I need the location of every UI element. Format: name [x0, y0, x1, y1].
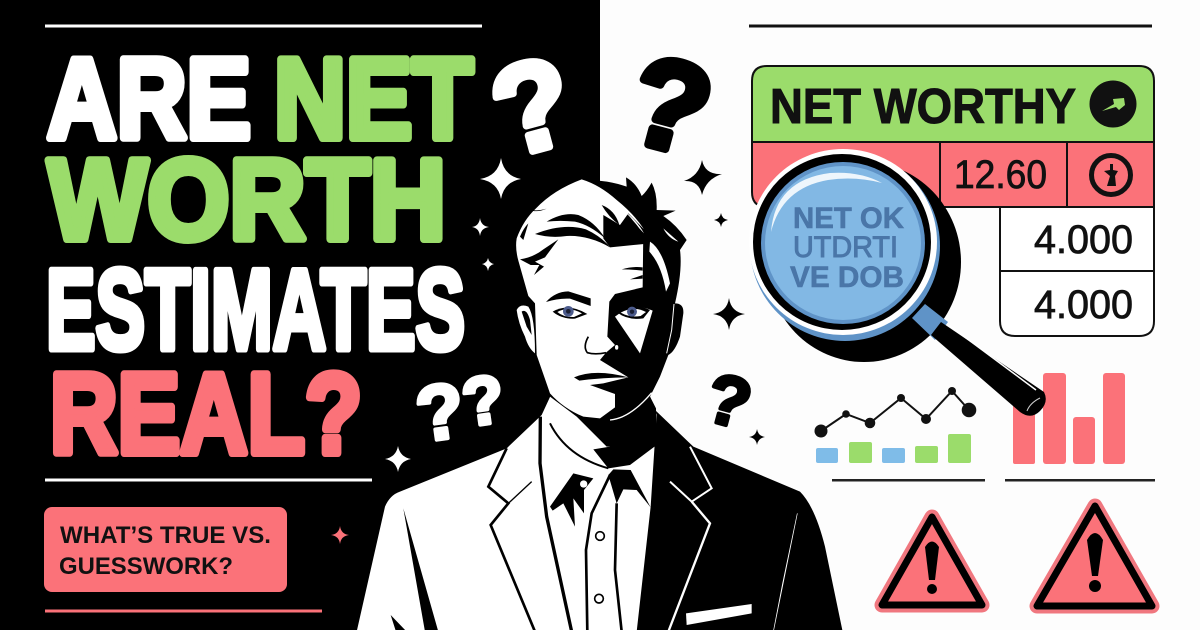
- shirt buttons: [595, 532, 604, 603]
- chart: line with small bars: [814, 387, 976, 463]
- callout: what's true vs guesswork: WHAT’S TRUE VS.: [60, 522, 271, 549]
- icon: small black question mark: ?: [698, 358, 759, 444]
- collar fold right: [608, 469, 651, 507]
- table: net worth card: [752, 66, 1154, 336]
- ear right highlight: [667, 304, 674, 353]
- table: net worth card: 4.000: [1034, 218, 1133, 262]
- lens text: VE DOB: [790, 261, 904, 294]
- head group: [516, 177, 687, 447]
- shirt placket lines: [586, 475, 622, 630]
- jacket: right dark side: [627, 410, 843, 630]
- sparkles: [385, 158, 765, 472]
- table: net worth card: 12.60: [954, 153, 1047, 197]
- forehead marks: [622, 267, 643, 279]
- title: [46, 36, 473, 478]
- callout: what's true vs guesswork: GUESSWORK?: [59, 553, 233, 580]
- icon: white double question marks: ?: [457, 360, 509, 442]
- right jacket lapel lines: [668, 447, 712, 630]
- hair streaks: [520, 205, 644, 275]
- head black silhouette: [543, 177, 687, 447]
- icon: warning triangle right: [1037, 506, 1152, 606]
- question marks: [410, 27, 759, 459]
- title word: REAL?: REAL?: [50, 351, 362, 478]
- mouth: [574, 373, 628, 381]
- lens text: [790, 202, 904, 294]
- chart: red bars: [1013, 373, 1125, 464]
- title word: ESTIMATES: ESTIMATES: [46, 247, 465, 374]
- lens text: UTDRTI: [793, 231, 898, 264]
- eye left: [553, 306, 587, 319]
- icon: circled symbol: [1092, 156, 1130, 194]
- left sleeve crease: [391, 508, 438, 630]
- magnifier handle: [912, 304, 1046, 416]
- jaw rim light: [610, 393, 652, 420]
- person illustration: [357, 177, 843, 630]
- table header: green NET WORTHY: [752, 66, 1154, 142]
- nose: [585, 337, 618, 354]
- icon: magnifying glass: [749, 149, 1046, 416]
- icon: black question mark: ?: [615, 27, 726, 184]
- right sleeve crease: [773, 513, 797, 630]
- title word: WORTH: WORTH: [48, 137, 446, 264]
- title word: ARE: ARE: [47, 36, 251, 163]
- eye right: [617, 306, 650, 319]
- left jacket lapel lines: [488, 417, 572, 630]
- title word: NET: NET: [274, 36, 473, 163]
- icon: warning triangle left: [882, 517, 982, 605]
- panel: black left background: [0, 0, 600, 630]
- table: net worth card: NET WORTHY: [770, 80, 1076, 134]
- hair: white strokes on dark side: [623, 210, 678, 292]
- lens text: NET OK: [793, 202, 904, 235]
- icon: white double question marks: [410, 360, 509, 459]
- icon: white question mark: ?: [477, 28, 588, 185]
- jacket: left light side and shirt: [357, 393, 657, 630]
- icon: white double question marks: ?: [410, 365, 470, 459]
- ear left: [517, 306, 535, 353]
- neck shadow: [573, 390, 657, 468]
- brow left: [546, 291, 591, 306]
- icon: pink sparkle: [331, 526, 349, 544]
- cheek highlight: [615, 307, 653, 353]
- shirt collar line: [550, 423, 608, 468]
- jacket pocket: [686, 604, 752, 625]
- jaw contour: [550, 393, 590, 418]
- collar fold left: [550, 473, 593, 527]
- table: net worth card: 4.000: [1034, 283, 1133, 327]
- icon: round arrow: [1090, 80, 1136, 128]
- hair and face lit area: [516, 179, 643, 418]
- callout: what's true vs guesswork: [44, 507, 287, 592]
